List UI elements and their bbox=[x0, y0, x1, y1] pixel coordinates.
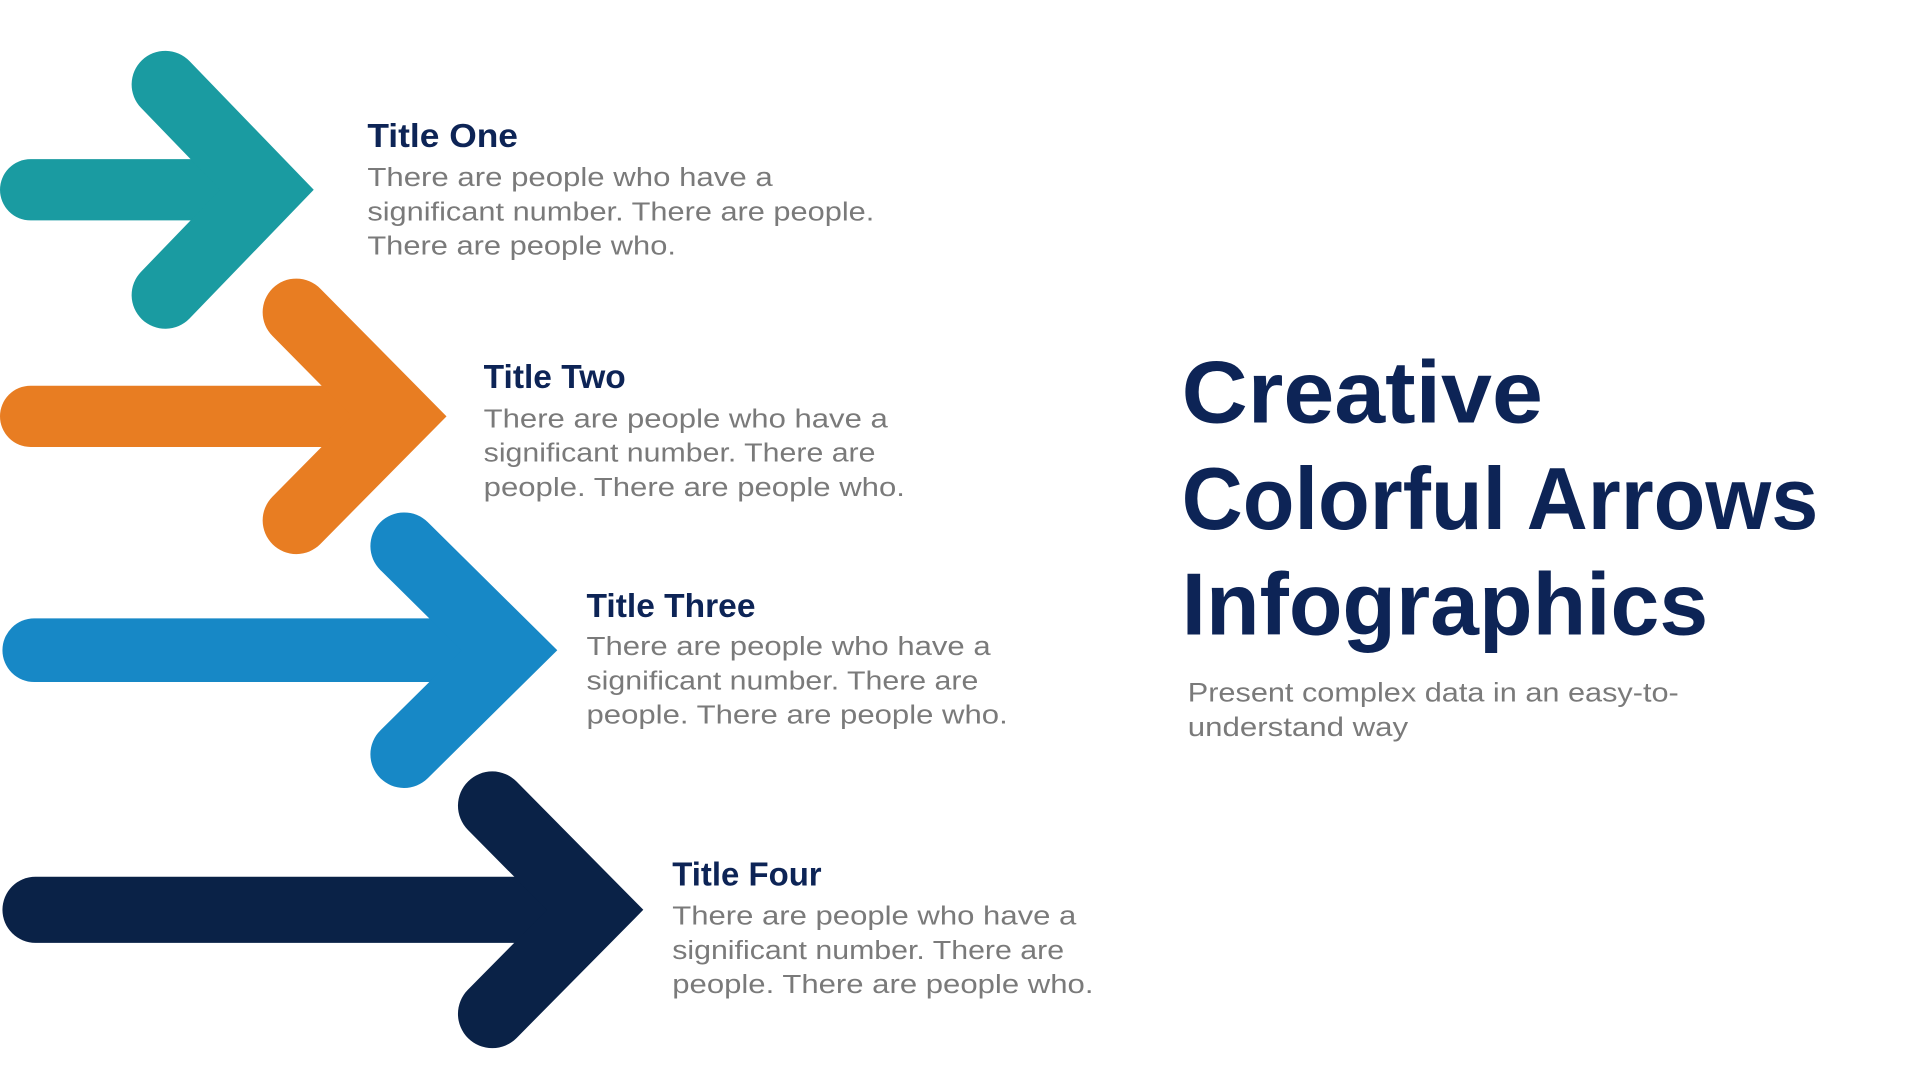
text block: title one: significant number. There are people. bbox=[367, 196, 874, 226]
main heading bbox=[1182, 342, 1818, 653]
text block: title three: people. There are people who. bbox=[587, 700, 1008, 730]
text block: title two: There are people who have a bbox=[484, 403, 888, 433]
subtitle bbox=[1188, 678, 1679, 742]
text block: title four: There are people who have a bbox=[672, 900, 1077, 930]
main heading: Creative bbox=[1182, 342, 1543, 441]
text block: title one: There are people who have a bbox=[367, 162, 773, 192]
text block: title three: significant number. There are bbox=[587, 665, 978, 695]
arrow two: orange bbox=[31, 312, 399, 520]
text block: title three: Title Three bbox=[587, 588, 756, 625]
main heading: Colorful Arrows bbox=[1182, 449, 1818, 548]
text block: title one: Title One bbox=[367, 118, 518, 155]
text block: title four: significant number. There are bbox=[672, 935, 1064, 965]
subtitle: understand way bbox=[1188, 712, 1409, 742]
arrow four: navy bbox=[36, 806, 595, 1014]
text block: title one: There are people who. bbox=[367, 231, 676, 261]
text block: title two: significant number. There are bbox=[484, 438, 876, 468]
main heading: Infographics bbox=[1182, 554, 1708, 653]
arrow one: teal bbox=[31, 84, 269, 295]
subtitle: Present complex data in an easy-to- bbox=[1188, 678, 1679, 708]
text block: title two bbox=[484, 359, 905, 502]
text block: title four: Title Four bbox=[672, 856, 822, 893]
text block: title one bbox=[367, 118, 874, 261]
arrow three: blue bbox=[34, 546, 509, 754]
text block: title two: Title Two bbox=[484, 359, 626, 396]
text block: title four: people. There are people who. bbox=[672, 969, 1093, 999]
text block: title three: There are people who have a bbox=[587, 631, 991, 661]
text block: title four bbox=[672, 856, 1093, 999]
text block: title three bbox=[587, 588, 1008, 730]
text block: title two: people. There are people who. bbox=[484, 472, 905, 502]
